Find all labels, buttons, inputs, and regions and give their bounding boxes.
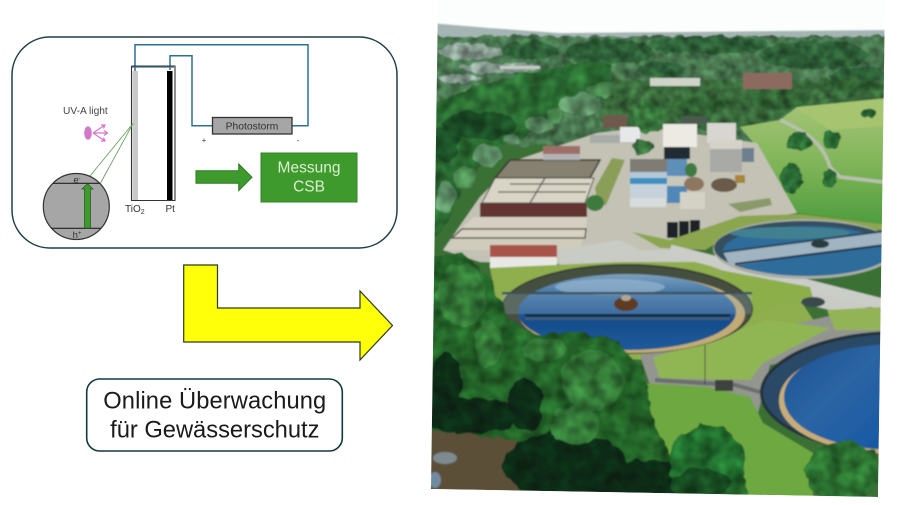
- Photostorm box: Photostorm: [226, 122, 278, 132]
- meadow: [740, 98, 884, 224]
- band gap circle: e: [73, 175, 79, 186]
- grass strip by basins: [595, 158, 625, 205]
- electrochemical cell: [132, 66, 175, 200]
- tank lower right: [759, 330, 880, 454]
- label: TiO2: TiO: [125, 204, 141, 215]
- label: Pt: Pt: [166, 204, 175, 215]
- box: Messung CSB: [261, 153, 357, 202]
- road: [670, 250, 890, 306]
- band gap circle: -: [79, 176, 81, 182]
- right corner tree: [806, 441, 880, 503]
- icon: UV lamp: [84, 125, 108, 141]
- white buildings: [663, 124, 697, 147]
- label: plus: +: [202, 136, 207, 145]
- zoom lines: [90, 124, 133, 184]
- center trees: [632, 101, 669, 155]
- label: minus: -: [297, 136, 300, 145]
- margin right of photo: [420, 0, 899, 505]
- circuit wires: [135, 45, 308, 126]
- bottom tree: [669, 425, 745, 501]
- callout: online monitoring: [87, 379, 342, 451]
- left forest: [425, 62, 614, 240]
- arrow: to measurement: [196, 164, 252, 191]
- tank upper right: [713, 219, 897, 279]
- basins: [495, 160, 600, 178]
- distant buildings: [743, 73, 792, 89]
- base: [425, 0, 899, 34]
- arrow: yellow bent arrow: [184, 265, 392, 360]
- red roof building: [490, 245, 557, 268]
- label: TiO2: 2: [141, 209, 145, 216]
- Photostorm box: [212, 118, 292, 134]
- foreground trees: [420, 253, 752, 500]
- distant landscape and forest: [425, 36, 899, 146]
- band gap circle: h: [73, 230, 78, 241]
- main tank: [501, 264, 753, 354]
- callout: online monitoring: Online Überwachung: [103, 387, 326, 414]
- black tanks: [667, 220, 700, 238]
- grass between tanks: [722, 270, 814, 302]
- callout: online monitoring: für Gewässerschutz: [110, 417, 319, 443]
- plant ground: [443, 127, 797, 265]
- tree at road: [586, 195, 604, 211]
- box: Messung CSB: CSB: [293, 179, 325, 196]
- river: [431, 430, 520, 490]
- band gap circle: +: [78, 231, 82, 237]
- light area below buildings: [557, 240, 882, 310]
- earth piles: [684, 177, 704, 191]
- box: Messung CSB: Messung: [278, 160, 340, 176]
- label: UV-A light: UV-A light: [63, 106, 108, 117]
- panel: photocatalytic sensor diagram: [12, 37, 397, 248]
- grey ground: [640, 306, 880, 413]
- band gap circle: [43, 174, 109, 241]
- grass strip: [632, 214, 899, 250]
- photo: wastewater treatment plant aerial view: [431, 22, 884, 497]
- small buildings: [543, 146, 580, 154]
- blue building: [630, 158, 687, 207]
